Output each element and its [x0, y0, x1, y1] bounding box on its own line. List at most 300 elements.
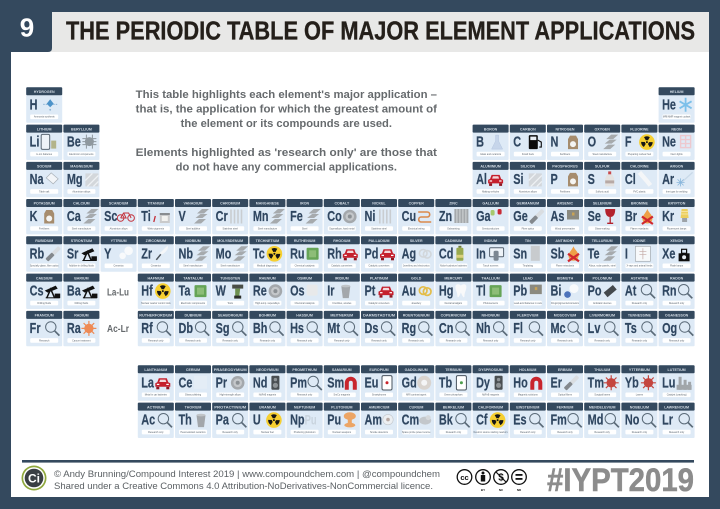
cell: tungsten: W — [216, 282, 227, 299]
logo: Compound Interest: Ci — [28, 472, 40, 486]
cell: samarium: SmCo magnets — [334, 394, 351, 397]
cell: erbium: Optical fibres — [558, 394, 573, 397]
icon: fertiliser bag — [44, 210, 54, 224]
cell: cerium: Ce — [179, 374, 192, 391]
cell: praseodymium: High-strength alloys — [220, 394, 242, 397]
cell: nobelium: No — [625, 411, 640, 428]
cell: ruthenium: Ru — [290, 245, 305, 262]
icon: car — [343, 249, 358, 260]
cell: zirconium — [138, 236, 174, 272]
cell: boron: Glass and ceramics — [480, 153, 502, 156]
icon: magnifier — [344, 322, 358, 336]
cell: tin — [510, 236, 546, 272]
cell: vanadium: V — [179, 207, 186, 224]
title bar — [40, 12, 709, 52]
cell: nobelium: NOBELIUM — [630, 405, 649, 409]
cell: bohrium: Research only — [260, 339, 276, 342]
cell: xenon: XENON — [670, 239, 683, 243]
licence icons: ND — [517, 488, 522, 492]
icon: optical fibre — [564, 375, 579, 391]
cell: actinium: Research only — [148, 431, 164, 434]
cell: cerium: CERIUM — [186, 368, 200, 372]
cell: potassium: Fertilisers — [39, 227, 50, 230]
cell: manganese: MANGANESE — [256, 202, 280, 206]
cell: thorium: Th — [179, 411, 192, 428]
icon: magnifier — [678, 284, 692, 298]
icon: wood crate — [567, 210, 579, 220]
cell: gadolinium — [398, 365, 434, 401]
cell: rutherfordium: Research only — [148, 339, 164, 342]
icon: steel sheets — [194, 209, 209, 224]
cell: livermorium: LIVERMORIUM — [589, 314, 615, 318]
cell: thallium: Photosensors — [483, 302, 499, 305]
cell: molybdenum: Mo — [216, 245, 232, 262]
cell: mendelevium: MENDELEVIUM — [589, 405, 615, 409]
cell: radium: Cancer treatment — [72, 339, 91, 342]
cell: technetium: Medical diagnostics — [257, 265, 279, 268]
icon: magnifier — [568, 322, 582, 336]
cell: iridium: IRIDIUM — [335, 276, 349, 280]
cell: antimony: ANTIMONY — [555, 239, 575, 243]
cell: barium — [63, 274, 99, 309]
icon: phone with green screen — [456, 376, 466, 390]
cell: francium: FRANCIUM — [35, 314, 54, 318]
cell: thorium: THORIUM — [185, 405, 201, 409]
cell: cerium: Glass polishing — [185, 394, 202, 397]
cell: lawrencium: Research only — [669, 431, 685, 434]
icon: fertiliser bag — [568, 136, 578, 149]
cell: promethium: Pm — [290, 374, 307, 391]
icon: magnifier — [158, 414, 172, 427]
cell: nobelium — [621, 403, 657, 438]
cell: indium: Touch screens — [483, 265, 499, 268]
icon: magnifier — [233, 414, 246, 427]
icon: pipe — [639, 172, 650, 185]
cell: sodium: Na — [30, 170, 44, 187]
cell: silicon: Aluminium alloys — [519, 190, 538, 193]
cell: thulium: THULIUM — [594, 368, 610, 372]
cell: dubnium: DUBNIUM — [185, 314, 201, 318]
cell: gallium — [473, 199, 509, 234]
cell: barium: Drilling fluids — [75, 302, 89, 305]
cell: zirconium: Ceramics — [151, 265, 162, 268]
cell: erbium: Er — [551, 374, 562, 391]
icon: magnifier — [456, 322, 470, 336]
cell: lawrencium: Lr — [662, 411, 673, 428]
icon: medicine bottle — [564, 284, 578, 298]
cell: rhenium: RHENIUM — [259, 276, 276, 280]
cell: mercury: MERCURY — [444, 276, 463, 280]
cell: gold — [398, 274, 434, 309]
cell: chromium: CHROMIUM — [220, 202, 240, 206]
cell: indium: In — [476, 245, 486, 262]
icon: fertiliser bag — [568, 173, 578, 186]
cell: terbium — [435, 365, 471, 401]
cell: fermium — [547, 403, 583, 438]
icon: alloy — [529, 173, 542, 186]
cell: flerovium: Fl — [513, 319, 523, 336]
cell: holmium: Magnetic solutions — [518, 394, 538, 397]
cell: rubidium: RUBIDIUM — [35, 239, 53, 243]
cell: rhenium: Re — [253, 282, 267, 299]
cell: europium: Smartphones — [372, 394, 387, 397]
icon: magnifier — [456, 414, 470, 427]
cell: krypton — [659, 199, 695, 234]
cell: scandium: Sc — [104, 207, 117, 224]
cell: flerovium: Research only — [520, 339, 536, 342]
cell: meitnerium — [324, 311, 360, 346]
cell: aluminium — [473, 162, 509, 197]
cell: nickel: NICKEL — [372, 202, 386, 206]
icon: magnet — [347, 379, 355, 390]
cell: seaborgium — [212, 311, 248, 346]
cell: berkelium: Bk — [439, 411, 454, 428]
cell: flerovium — [510, 311, 546, 346]
cell: xenon — [659, 236, 695, 272]
cell: iridium — [324, 274, 360, 309]
cell: lead: LEAD — [523, 276, 533, 280]
cell: oxygen — [584, 125, 620, 160]
cell: promethium: Research only — [297, 394, 313, 397]
icon: ammonia molecule — [43, 99, 57, 111]
cell: hydrogen: Ammonia synthesis — [34, 116, 55, 119]
cell: germanium — [510, 199, 546, 234]
icon: paint tin — [154, 213, 170, 223]
icon: flame crossed — [642, 209, 653, 224]
cell: darmstadtium — [361, 311, 397, 346]
cell: curium: CURIUM — [409, 405, 423, 409]
cell: silver: Jewellery and electronics — [403, 265, 430, 268]
cell: nobelium: Research only — [632, 431, 648, 434]
cell: lithium: Li-ion batteries — [36, 153, 53, 156]
cell: nickel — [361, 199, 397, 234]
icon: flask — [492, 135, 503, 149]
icon: gear — [82, 135, 96, 149]
cell: rhodium: Rh — [327, 245, 342, 262]
icon: disc — [343, 210, 357, 223]
cell: potassium: POTASSIUM — [34, 202, 55, 206]
icon: magnifier — [494, 322, 507, 336]
cell: nitrogen: N — [551, 133, 558, 150]
cell: germanium: GERMANIUM — [517, 202, 539, 206]
cell: manganese: Mn — [253, 207, 269, 224]
cell: hassium: HASSIUM — [296, 314, 313, 318]
cell: titanium: TITANIUM — [147, 202, 164, 206]
cell: chlorine: PVC plastic — [633, 190, 646, 193]
icon: magnifier — [419, 322, 432, 336]
cell: lutetium: LUTETIUM — [668, 368, 686, 372]
cell: osmium: OSMIUM — [297, 276, 312, 280]
cell: boron: B — [476, 133, 484, 150]
cell: americium: AMERICIUM — [369, 405, 389, 409]
icon: radiation — [267, 246, 282, 262]
icon: fuel pump — [529, 135, 541, 149]
cell: neodymium: NEODYMIUM — [256, 368, 279, 372]
cell: platinum: Catalytic converters — [368, 302, 390, 305]
icon: phone and battery — [41, 134, 56, 149]
cell: silicon: SILICON — [521, 165, 535, 169]
cell: bromine — [621, 199, 657, 234]
cell: xenon: Xe — [662, 245, 675, 262]
icon: snowflake — [680, 98, 692, 112]
intro text: the element or its compounds are used. — [181, 118, 392, 130]
cell: cadmium: Cd — [439, 245, 453, 262]
cell: technetium — [249, 236, 285, 272]
cell: osmium: Chemical catalysts — [295, 302, 315, 305]
cell: ytterbium: Lasers — [636, 394, 644, 397]
cell: thallium: THALLIUM — [481, 276, 500, 280]
cell: cadmium — [435, 236, 471, 272]
cell: californium: CALIFORNIUM — [478, 405, 503, 409]
cell: uranium: Nuclear fuel — [261, 431, 274, 434]
cell: oganesson: Research only — [669, 339, 685, 342]
intro text: do not have any commercial applications. — [176, 162, 397, 174]
cell: helium: He — [662, 96, 676, 113]
cell: palladium: PALLADIUM — [369, 239, 389, 243]
cell: lithium — [26, 125, 62, 160]
cell: yttrium — [101, 236, 137, 272]
cell: roentgenium: ROENTGENIUM — [403, 314, 430, 318]
cell: thulium: Surgical lasers — [594, 394, 611, 397]
cell: berkelium: Research only — [446, 431, 462, 434]
icon: neon sign — [681, 136, 691, 148]
licence icons: $ — [498, 472, 504, 484]
cell: rutherfordium: Rf — [141, 319, 153, 336]
cell: uranium: U — [253, 411, 261, 428]
cell: krypton: KRYPTON — [668, 202, 686, 206]
icon: magnifier — [233, 322, 246, 336]
cell: technetium: TECHNETIUM — [256, 239, 279, 243]
footer credits: © Andy Brunning/Compound Interest 2019 | www.compoundchem.com | @compoundchem — [54, 468, 440, 479]
cell: tin: TIN — [525, 239, 531, 243]
cell: calcium: CALCIUM — [73, 202, 90, 206]
cell: gold: Jewellery — [411, 302, 422, 305]
icon: laser burst — [604, 375, 619, 390]
icon: gold rings — [419, 287, 431, 295]
icon: antistatic brush — [604, 285, 617, 297]
cell: samarium — [324, 365, 360, 401]
cell: boron: BORON — [484, 127, 498, 131]
cell: moscovium — [547, 311, 583, 346]
cell: tantalum: Electronic components — [181, 302, 206, 305]
cell: holmium: HOLMIUM — [519, 368, 536, 372]
cell: francium: Research — [39, 339, 50, 342]
cell: mercury: Hg — [439, 282, 453, 299]
cell: arsenic: Wood preservative — [555, 227, 576, 230]
icon: steel sheets — [270, 209, 285, 224]
cell: copper — [398, 199, 434, 234]
icon: camera flash — [679, 249, 690, 261]
cell: chromium: Cr — [216, 207, 228, 224]
cell: fermium: Research only — [557, 431, 573, 434]
icon: oil pump — [82, 286, 97, 298]
cell: titanium: White pigments — [148, 227, 165, 230]
cell: copernicium — [435, 311, 471, 346]
intro text — [136, 89, 438, 174]
cell: sulfur: S — [588, 170, 595, 187]
cell: neon: Ne — [662, 133, 676, 150]
cell: germanium: Ge — [513, 207, 528, 224]
cell: xenon: Flash lamps — [670, 265, 684, 268]
icon: magnifier — [308, 376, 322, 390]
cell: thallium — [473, 274, 509, 309]
cell: gallium: Ga — [476, 207, 491, 224]
cell: lithium: LITHIUM — [37, 127, 51, 131]
cell: thulium: Tm — [588, 374, 604, 391]
cell: radium: RADIUM — [74, 314, 89, 318]
cell: holmium: Ho — [513, 374, 528, 391]
cell: chlorine — [621, 162, 657, 197]
cell: francium: Fr — [30, 319, 41, 336]
lanthanide label: La-Lu — [107, 288, 129, 298]
cell: roentgenium: Research only — [409, 339, 425, 342]
icon: magnifier — [307, 322, 321, 336]
cell: tin: Sn — [513, 245, 527, 262]
cell: neptunium — [287, 403, 323, 438]
cell: carbon: Fossil fuels — [522, 153, 535, 156]
icon: refinery — [677, 377, 692, 390]
icon: salt — [46, 173, 58, 184]
cell: chromium — [212, 199, 248, 234]
cell: rhodium: RHODIUM — [333, 239, 350, 243]
icon: silver rings — [419, 250, 431, 258]
icon: smoke detector — [383, 414, 393, 425]
cell: erbium: ERBIUM — [558, 368, 572, 372]
icon: magnifier — [529, 322, 543, 336]
icon: magnifier — [679, 414, 693, 427]
cell: radium — [63, 311, 99, 346]
cell: tellurium: Alloys, solar panels, steel — [589, 265, 616, 268]
cell: barium: Ba — [67, 282, 82, 299]
cell: fluorine: Preparing nuclear fuel — [628, 153, 652, 156]
cell: palladium — [361, 236, 397, 272]
cell: rutherfordium — [138, 311, 174, 346]
cell: magnesium: MAGNESIUM — [70, 165, 93, 169]
cell: promethium: PROMETHIUM — [292, 368, 317, 372]
cell: fluorine: F — [625, 133, 632, 150]
cell: neon: Neon lights — [671, 153, 683, 156]
cell: indium: INDIUM — [484, 239, 497, 243]
cell: hafnium: Hf — [141, 282, 153, 299]
cell: neon — [659, 125, 695, 160]
cell: selenium: SELENIUM — [593, 202, 611, 206]
footer credits: Shared under a Creative Commons 4.0 Attribution-NoDerivatives-NonCommercial licence. — [54, 480, 433, 491]
cell: osmium — [287, 274, 323, 309]
cell: scandium: SCANDIUM — [109, 202, 128, 206]
cell: cadmium: Nickel-cadmium batteries — [440, 265, 468, 268]
cell: promethium — [287, 365, 323, 401]
cell: uranium: URANIUM — [259, 405, 276, 409]
cell: krypton: Fluorescent lamps — [667, 227, 687, 230]
cell: niobium: Steel manufacture — [183, 265, 203, 268]
cell: dysprosium: Dy — [476, 374, 491, 391]
icon: steel sheets — [233, 246, 248, 261]
hashtag: #IYPT2019 — [547, 462, 694, 498]
cell: rutherfordium: RUTHERFORDIUM — [139, 314, 172, 318]
cell: oganesson: Og — [662, 319, 677, 336]
cell: potassium: K — [30, 207, 38, 224]
icon: magnifier — [46, 322, 59, 336]
cell: sodium — [26, 162, 62, 197]
cell: iodine: IODINE — [633, 239, 646, 243]
cell: iron: Steel — [302, 227, 308, 230]
icon: magnifier — [270, 322, 284, 336]
cell: caesium — [26, 274, 62, 309]
licence icons: BY — [481, 488, 485, 492]
cell: titanium: Ti — [141, 207, 151, 224]
cell: einsteinium — [510, 403, 546, 438]
number tab — [0, 0, 52, 52]
cell: einsteinium: Research only — [520, 431, 536, 434]
cell: rhodium: Catalytic converters — [331, 265, 353, 268]
cell: chromium: Stainless steel — [222, 227, 238, 230]
cell: chlorine: CHLORINE — [630, 165, 649, 169]
cell: bohrium — [249, 311, 285, 346]
icon: laser burst — [641, 375, 656, 390]
cell: bismuth: Drugs/pigments/cosmetics — [551, 302, 580, 305]
cell: ruthenium: Chemical catalysts — [295, 265, 315, 268]
cell: yttrium: YTTRIUM — [111, 239, 127, 243]
icon: fluorescent bulb — [681, 209, 689, 222]
cell: curium — [398, 403, 434, 438]
cell: vanadium: VANADIUM — [183, 202, 203, 206]
cell: argon — [659, 162, 695, 197]
cell: yttrium: Ceramics — [114, 265, 124, 268]
cell: nihonium: NIHONIUM — [482, 314, 500, 318]
cell: manganese: Steel manufacture — [258, 227, 278, 230]
cell: potassium — [26, 199, 62, 234]
icon: magnifier — [530, 414, 544, 427]
cell: livermorium: Lv — [588, 319, 601, 336]
icon: optical fibre — [45, 246, 61, 262]
cell: einsteinium: EINSTEINIUM — [516, 405, 539, 409]
cell: copper: Electrical wiring — [408, 227, 425, 230]
cell: beryllium — [63, 125, 99, 160]
cell: roentgenium: Rg — [402, 319, 416, 336]
icon: disc — [231, 376, 244, 390]
cell: tellurium: Te — [588, 245, 600, 262]
icon: ceramic knife — [156, 246, 168, 260]
cell: nickel: Stainless steel — [371, 227, 387, 230]
cell: mendelevium — [584, 403, 620, 438]
cell: oganesson: OGANESSON — [665, 314, 689, 318]
cell: fermium: Fm — [551, 411, 567, 428]
cell: darmstadtium: DARMSTADTIUM — [363, 314, 395, 318]
cell: vanadium: Steel additive — [186, 227, 201, 230]
cell: thallium: Tl — [476, 282, 486, 299]
cell: astatine: ASTATINE — [631, 276, 649, 280]
cell: lead: Pb — [513, 282, 527, 299]
cell: iodine: I — [625, 245, 628, 262]
cell: zinc: ZINC — [449, 202, 458, 206]
icon: x-ray film — [635, 246, 650, 261]
cell: actinium: ACTINIUM — [147, 405, 165, 409]
cell: niobium: NIOBIUM — [185, 239, 201, 243]
icon: wine glass — [605, 209, 615, 223]
cell: neptunium: Np — [290, 411, 305, 428]
actinide label: Ac-Lr — [107, 324, 129, 335]
cell: yttrium: Y — [104, 245, 112, 262]
cell: moscovium: Research only — [557, 339, 573, 342]
icon: radiation — [639, 134, 655, 150]
cell: tellurium — [584, 236, 620, 272]
cell: bohrium: Bh — [253, 319, 268, 336]
cell: germanium: Fibre optics — [522, 227, 535, 230]
icon: mushroom cloud — [344, 412, 356, 427]
icon: space probe — [419, 415, 431, 425]
cell: praseodymium: PRASEODYMIUM — [214, 368, 247, 372]
cell: oxygen: OXYGEN — [595, 127, 610, 131]
